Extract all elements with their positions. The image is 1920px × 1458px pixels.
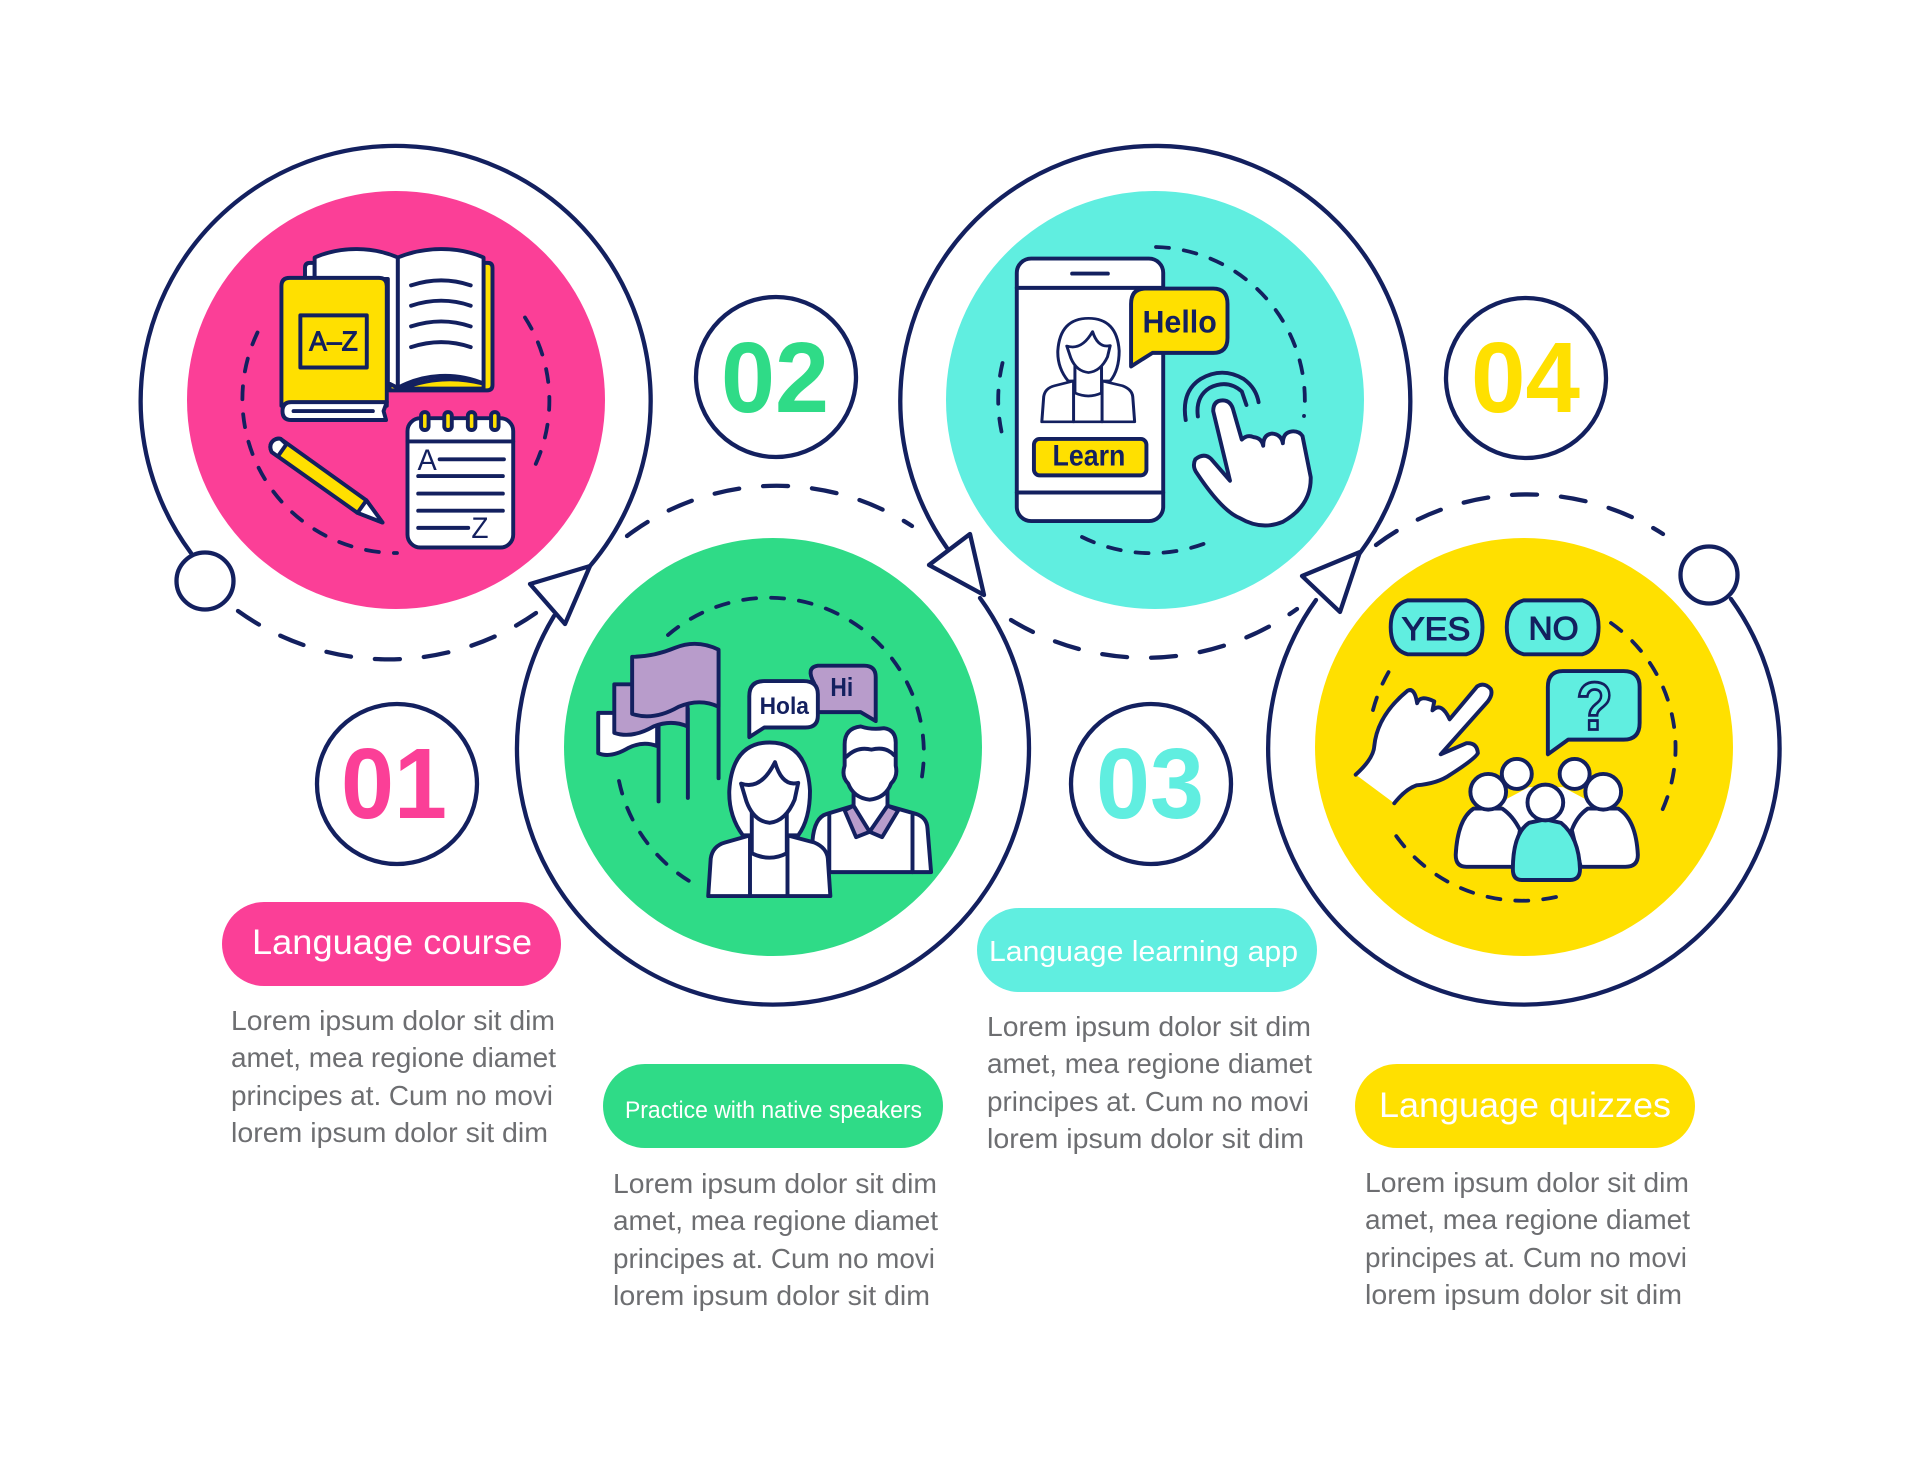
pill heading: Language quizzes: Language quizzes — [1379, 1086, 1671, 1125]
dashed connector: step 4 — [1376, 494, 1663, 545]
number badge 03: 03 — [1096, 728, 1204, 840]
end node circle — [1680, 546, 1738, 604]
inner dashed ring: step 2 — [619, 598, 924, 885]
number badge 03 — [1071, 704, 1231, 864]
question bubble: ? — [1576, 669, 1613, 744]
icon: phone app with pointing hand — [1017, 259, 1311, 526]
number badge 01 — [317, 704, 477, 864]
outer ring: step 1 — [141, 146, 651, 566]
hand — [1356, 685, 1492, 803]
panel: step 3 filled circle — [946, 191, 1364, 609]
text block: step 3: lorem ipsum dolor sit dim — [987, 1123, 1304, 1154]
Learn button — [1034, 439, 1146, 475]
Learn button: Learn — [1052, 440, 1125, 473]
text block: step 2: lorem ipsum dolor sit dim — [613, 1280, 930, 1311]
phone — [1017, 259, 1163, 521]
arrow: step 3 to 4 — [1302, 552, 1360, 612]
text block: step 1: principes at. Cum no movi — [231, 1080, 553, 1111]
pill heading: Language learning app: Language learning app — [989, 936, 1298, 968]
panel: step 2 filled circle — [564, 538, 982, 956]
text block: step 3: Lorem ipsum dolor sit dim — [987, 1011, 1311, 1042]
flags — [598, 644, 719, 801]
woman — [708, 742, 830, 896]
text block: step 1: amet, mea regione diamet — [231, 1042, 556, 1073]
pill heading: Language course — [222, 902, 561, 986]
notepad — [407, 412, 513, 547]
number badge 02 — [696, 297, 856, 457]
pill heading: Practice with native speakers: Practice with native speakers — [625, 1097, 922, 1124]
panel: step 4 filled circle — [1315, 538, 1733, 956]
speech bubbles: Hi — [830, 674, 853, 702]
text block: step 1 — [231, 1005, 556, 1148]
text block: step 4: principes at. Cum no movi — [1365, 1242, 1687, 1273]
icon: quiz with audience — [1356, 600, 1640, 880]
closed A-Z book: A–Z — [309, 326, 358, 357]
NO button — [1507, 600, 1599, 654]
open book — [305, 249, 492, 390]
text block: step 1: Lorem ipsum dolor sit dim — [231, 1005, 555, 1036]
arrow: step 1 to 2 — [530, 566, 590, 624]
outer ring: step 4 — [1268, 599, 1780, 1005]
pill heading: Language course: Language course — [252, 923, 532, 962]
audience — [1456, 759, 1638, 880]
start node circle — [176, 552, 234, 610]
panel: step 1 filled circle — [187, 191, 605, 609]
YES button: YES — [1402, 610, 1470, 647]
Hello bubble: Hello — [1142, 304, 1217, 339]
text block: step 2: principes at. Cum no movi — [613, 1243, 935, 1274]
woman avatar — [1042, 318, 1135, 422]
text block: step 4: Lorem ipsum dolor sit dim — [1365, 1167, 1689, 1198]
text block: step 4: lorem ipsum dolor sit dim — [1365, 1279, 1682, 1310]
text block: step 2: amet, mea regione diamet — [613, 1205, 938, 1236]
notepad: Z — [471, 512, 489, 545]
inner dashed ring: step 4 — [1373, 623, 1676, 901]
outer ring: step 3 — [900, 146, 1410, 553]
inner dashed ring: step 3 — [998, 247, 1305, 553]
notepad: A — [417, 444, 437, 477]
text block: step 3 — [987, 1011, 1312, 1154]
number badge 02: 02 — [721, 322, 829, 434]
text block: step 3: amet, mea regione diamet — [987, 1048, 1312, 1079]
icon: flags and speakers — [598, 644, 931, 896]
text block: step 4: amet, mea regione diamet — [1365, 1204, 1690, 1235]
dashed connector: step 3 — [1011, 609, 1297, 658]
text block: step 4 — [1365, 1167, 1690, 1310]
question bubble — [1548, 669, 1640, 754]
outer ring: step 2 — [517, 598, 1029, 1005]
closed A-Z book — [281, 278, 387, 420]
pill heading: Practice with native speakers — [603, 1064, 943, 1148]
text block: step 2 — [613, 1168, 938, 1311]
text block: step 2: Lorem ipsum dolor sit dim — [613, 1168, 937, 1199]
text block: step 1: lorem ipsum dolor sit dim — [231, 1117, 548, 1148]
Hello bubble — [1131, 289, 1227, 366]
speech bubbles — [749, 666, 876, 737]
pencil — [270, 439, 382, 522]
man — [812, 726, 931, 872]
text block: step 3: principes at. Cum no movi — [987, 1086, 1309, 1117]
pointing hand — [1185, 373, 1311, 526]
number badge 04 — [1446, 298, 1606, 458]
pill heading: Language learning app — [977, 908, 1317, 992]
icon: books, pencil and notepad — [270, 249, 513, 547]
NO button: NO — [1529, 610, 1579, 646]
pill heading: Language quizzes — [1355, 1064, 1695, 1148]
dashed connector: step 2 — [627, 486, 912, 536]
dashed connector: step 1 — [238, 611, 536, 659]
speech bubbles: Hola — [760, 693, 809, 720]
number badge 04: 04 — [1471, 322, 1580, 434]
arrow: step 2 to 3 — [929, 534, 984, 595]
inner dashed ring: step 1 — [242, 318, 549, 553]
number badge 01: 01 — [341, 728, 447, 840]
YES button — [1391, 600, 1482, 654]
